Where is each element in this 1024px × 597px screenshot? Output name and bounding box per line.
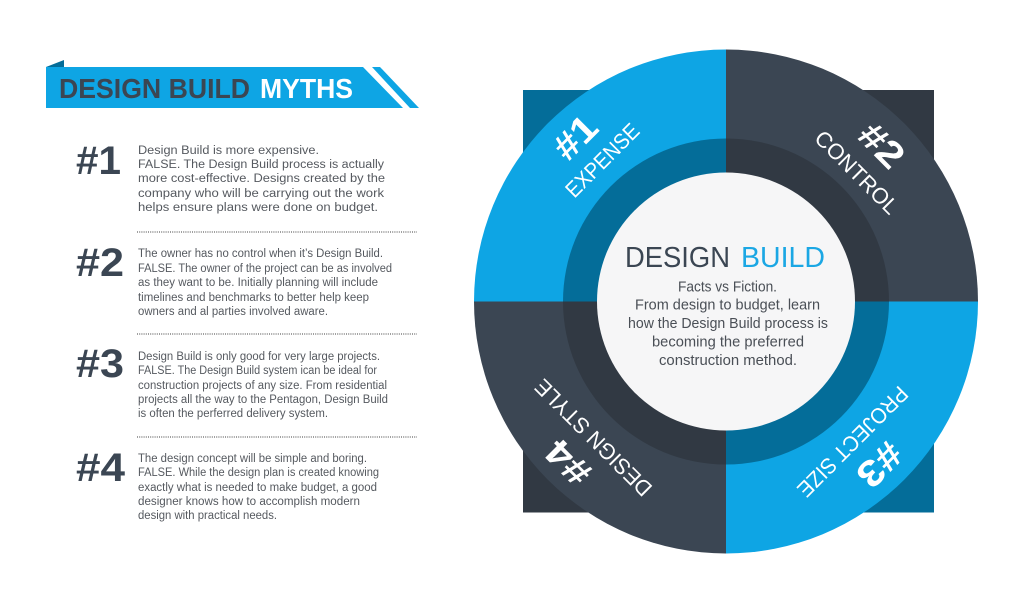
myth 4: The design concept will be simple and boring. bbox=[138, 453, 367, 465]
myth 2: timelines and benchmarks to better help keep bbox=[138, 292, 369, 304]
myth 3: projects all the way to the Pentagon, Design Build bbox=[138, 394, 388, 406]
center circle: DESIGN bbox=[625, 242, 730, 274]
myth 3: FALSE. The Design Build system ican be ideal for bbox=[138, 365, 377, 377]
center circle: how the Design Build process is bbox=[628, 316, 828, 332]
myth 4: #4 bbox=[76, 446, 126, 490]
myth 3: construction projects of any size. From residential bbox=[138, 380, 387, 392]
title banner bbox=[46, 60, 419, 108]
myth 3: Design Build is only good for very large projects. bbox=[138, 351, 380, 363]
center circle: construction method. bbox=[659, 353, 797, 369]
myth 1: Design Build is more expensive. bbox=[138, 145, 319, 157]
myth 1: company who will be carrying out the work bbox=[138, 188, 384, 200]
segment label: control: CONTROL bbox=[810, 125, 904, 219]
center circle: becoming the preferred bbox=[652, 334, 804, 350]
outer ring quadrants bbox=[474, 50, 978, 554]
segment label: design style: DESIGN STYLE bbox=[530, 374, 657, 501]
inner ring quadrants bbox=[563, 138, 889, 464]
myth 1: helps ensure plans were done on budget. bbox=[138, 202, 378, 214]
segment label: expense: EXPENSE bbox=[560, 118, 644, 202]
background square corners bbox=[523, 90, 934, 512]
myth 3: is often the perferred delivery system. bbox=[138, 408, 328, 420]
circular diagram bbox=[474, 50, 978, 554]
title banner: MYTHS bbox=[260, 73, 353, 104]
myth 1: #1 bbox=[76, 139, 121, 183]
myth 2: as they want to be. Initially planning will include bbox=[138, 277, 378, 289]
center circle: BUILD bbox=[741, 242, 825, 274]
myth 2: The owner has no control when it’s Design Build. bbox=[138, 248, 383, 260]
segment label: expense: #1 bbox=[545, 107, 606, 168]
segment label: project size: #3 bbox=[848, 433, 911, 496]
center circle bbox=[597, 172, 855, 430]
myth 2 bbox=[76, 241, 392, 318]
segment label: design style: #4 bbox=[537, 431, 600, 494]
myth 1 bbox=[76, 139, 385, 214]
title banner: DESIGN BUILD bbox=[59, 73, 250, 104]
center circle: Facts vs Fiction. bbox=[678, 280, 777, 296]
myth 3 bbox=[76, 342, 388, 420]
myth 4: FALSE. While the design plan is created knowing bbox=[138, 467, 379, 479]
myth 2: FALSE. The owner of the project can be as involved bbox=[138, 263, 392, 275]
myth 2: #2 bbox=[76, 241, 124, 285]
myth 4 bbox=[76, 446, 379, 522]
center circle: From design to budget, learn bbox=[635, 298, 820, 314]
myth 4: exactly what is needed to make budget, a good bbox=[138, 482, 377, 494]
segment label: project size: PROJECT SIZE bbox=[792, 381, 913, 502]
myth 4: design with practical needs. bbox=[138, 510, 277, 522]
myth 1: more cost-effective. Designs created by the bbox=[138, 173, 385, 185]
myth 4: designer knows how to accomplish modern bbox=[138, 496, 360, 508]
myth 2: owners and al parties involved aware. bbox=[138, 306, 328, 318]
myth 1: FALSE. The Design Build process is actually bbox=[138, 159, 384, 171]
myth 3: #3 bbox=[76, 342, 124, 386]
segment label: control: #2 bbox=[850, 114, 913, 177]
